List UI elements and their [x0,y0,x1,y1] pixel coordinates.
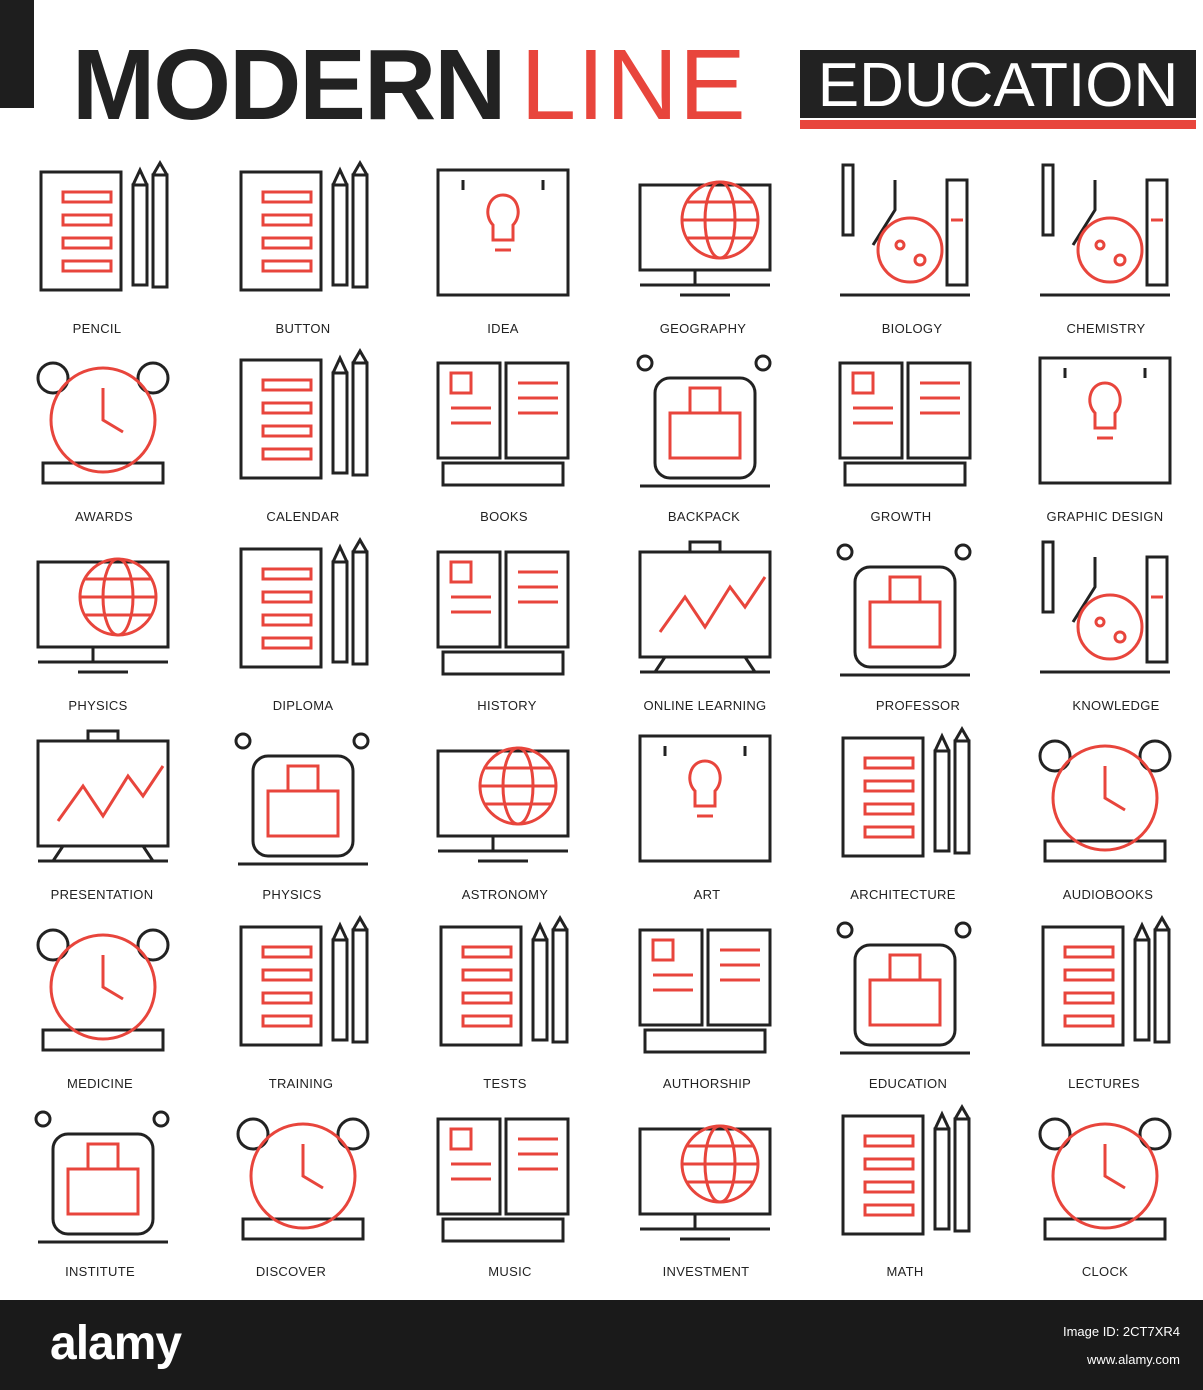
icon: backpack [636,354,772,488]
icon: education [836,922,972,1054]
label: art: ART [694,887,720,902]
footer image id: Image ID: 2CT7XR4 [1063,1324,1180,1339]
label: books: BOOKS [480,509,528,524]
icon: art [638,734,772,862]
label: backpack: BACKPACK [668,509,740,524]
label: tests: TESTS [483,1076,527,1091]
icon: online learning [638,540,772,674]
label: online learning: ONLINE LEARNING [644,698,766,713]
label: discover: DISCOVER [256,1264,326,1279]
icon: authorship [638,928,772,1054]
icon: history [436,550,570,676]
icon: geography [638,180,772,296]
icon: audiobooks [1038,740,1172,862]
icon: professor [836,544,972,676]
label: education: EDUCATION [869,1076,947,1091]
footer image id: www.alamy.com [1087,1352,1180,1367]
icon: biology [840,164,970,296]
icon: graphic design [1038,356,1172,484]
label: idea: IDEA [487,321,519,336]
icon: knowledge [1040,540,1170,674]
icon: physics [36,558,170,674]
icon: investment [638,1124,772,1240]
icon: growth [838,362,972,486]
label: medicine: MEDICINE [67,1076,133,1091]
icon: books [436,362,570,486]
label: calendar: CALENDAR [266,509,340,524]
icon: lectures [1042,915,1170,1046]
header: left black bar [0,0,34,108]
label: training: TRAINING [269,1076,333,1091]
label: math: MATH [886,1264,924,1279]
label: knowledge: KNOWLEDGE [1072,698,1160,713]
label: history: HISTORY [477,698,537,713]
label: architecture: ARCHITECTURE [850,887,956,902]
icon: chemistry [1040,164,1170,296]
icon: presentation [36,730,170,862]
icon: calendar [240,348,368,480]
icon: awards [36,362,170,484]
label: awards: AWARDS [75,509,133,524]
icon: architecture [842,726,970,858]
label: geography: GEOGRAPHY [660,321,746,336]
icon: discover [236,1118,370,1240]
label: diploma: DIPLOMA [273,698,333,713]
footer bar [0,1300,1203,1390]
icon: clock [1038,1118,1172,1240]
title: MODERNLINE [72,29,747,141]
label: music: MUSIC [488,1264,532,1279]
label: biology: BIOLOGY [882,321,942,336]
icon: tests [440,915,568,1046]
header: education badge: EDUCATION [818,51,1178,120]
label: button: BUTTON [275,321,330,336]
icon: training [240,915,368,1046]
icon: medicine [36,928,170,1052]
icon: astronomy [436,746,570,862]
label: clock: CLOCK [1082,1264,1128,1279]
label: physics: PHYSICS [262,887,322,902]
icon: physics magnet [234,732,370,866]
label: investment: INVESTMENT [663,1264,749,1279]
label: audiobooks: AUDIOBOOKS [1063,887,1153,902]
icon: music [436,1118,570,1242]
label: physics: PHYSICS [68,698,128,713]
icon: institute [34,1110,170,1244]
label: authorship: AUTHORSHIP [663,1076,751,1091]
icon: diploma [240,537,368,668]
label: chemistry: CHEMISTRY [1066,321,1146,336]
footer logo: alamy [50,1317,181,1370]
icon: math [842,1104,970,1236]
icon: idea [436,168,570,296]
label: growth: GROWTH [870,509,932,524]
label: institute: INSTITUTE [65,1264,135,1279]
label: professor: PROFESSOR [876,698,960,713]
label: lectures: LECTURES [1068,1076,1140,1091]
label: graphic design: GRAPHIC DESIGN [1047,509,1163,524]
label: astronomy: ASTRONOMY [462,887,548,902]
label: pencil: PENCIL [73,321,121,336]
footer image id [1063,1324,1180,1367]
icon: button [240,160,368,292]
label: presentation: PRESENTATION [51,887,153,902]
icon: pencil [40,160,168,292]
